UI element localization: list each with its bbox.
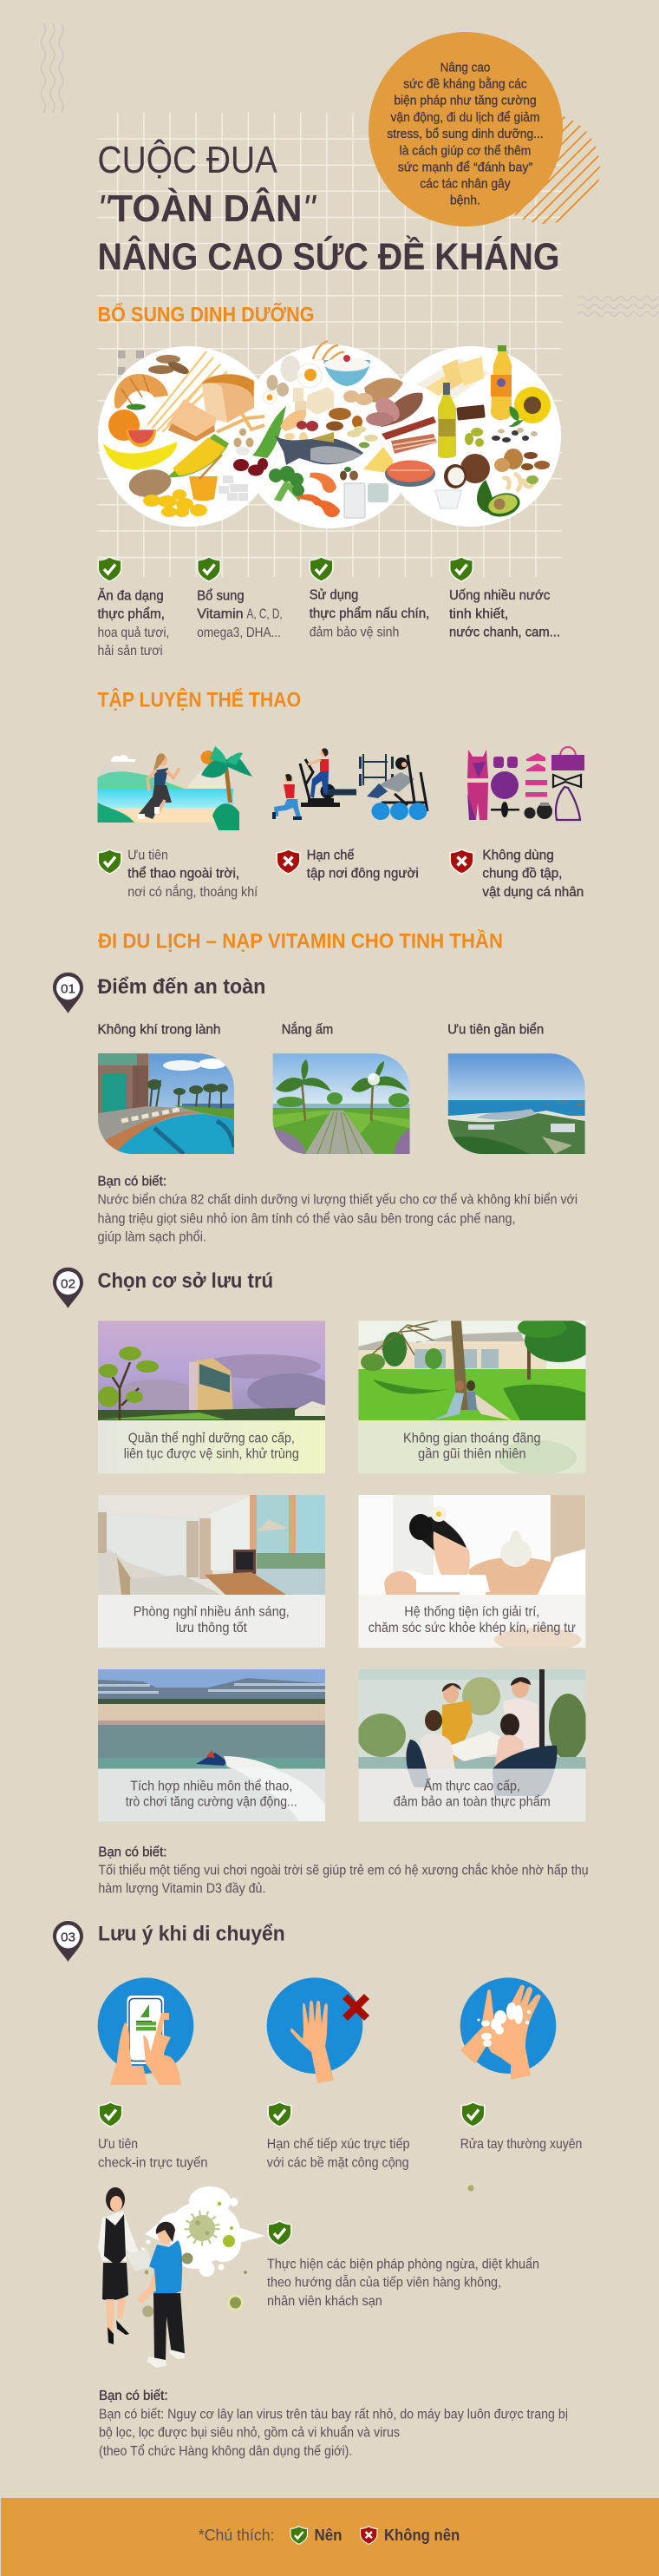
legend footer [1,2498,659,2576]
legend: should not: Không nên [384,2527,460,2544]
food plates illustration [98,341,561,528]
card: open green space: gần gũi thiên nhiên [418,1446,526,1461]
tip: follow staff guidance [267,2220,539,2309]
card: spa: chăm sóc sức khỏe khép kín, riêng tư [369,1621,576,1635]
tip: wash hands [460,2101,582,2152]
illustration: sports equipment [467,747,584,820]
tip: avoid crowds: tập nơi đông người [307,867,419,882]
tip: varied food [97,556,169,659]
tip: limit contact: Hạn chế tiếp xúc trực tiếp [267,2137,410,2152]
card: water sports: Tích hợp nhiều môn thể thao, [130,1779,292,1793]
did you know 3: bộ lọc, lọc được bụi siêu nhỏ, gồm cả vi khuẩn và virus [99,2425,400,2440]
tip: outdoor exercise: nơi có nắng, thoáng khí [127,883,258,900]
woman staff [98,2187,153,2344]
title: NÂNG CAO SỨC ĐỀ KHÁNG [97,235,560,279]
section 01 header [53,973,265,1013]
tip: vitamins [197,556,283,640]
section 01 header: Điểm đến an toàn [97,975,265,999]
tip: personal items: chung đồ tập, [482,867,562,882]
did you know 3: (theo Tổ chức Hàng không dân dụng thế giới). [99,2444,352,2459]
photo: palm trees [273,1053,410,1154]
travel tips [98,2101,582,2170]
intro callout: bệnh. [450,194,480,208]
destination labels: Nắng ấm [282,1021,333,1038]
illustration: beach run [97,746,252,830]
tip: varied food: hoa quả tươi, [97,626,169,640]
section 03 header [53,1921,285,1962]
card: open green space [359,1317,594,1475]
card: water sports: trò chơi tăng cường vận động... [126,1794,297,1809]
tip: vitamins: A, C, D, [246,607,283,622]
card: open green space: Không gian thoáng đãng [403,1431,541,1445]
did you know 1 [97,1175,577,1245]
tip: personal items [449,849,584,900]
icon: online check-in [98,1977,193,2085]
tip: avoid crowds: Hạn chế [307,849,355,863]
decorative striped circle [514,116,600,224]
plate 2: protein [252,341,437,518]
title [97,138,560,279]
did you know 3 [99,2389,568,2459]
illustration: gym [272,748,427,820]
tip: follow staff guidance: Thực hiện các biện pháp phòng ngừa, diệt khuẩn [267,2256,539,2271]
germ cloud [141,2186,265,2277]
intro callout [369,32,563,226]
card: dining: đảm bảo an toàn thực phẩm [394,1794,551,1809]
tip: personal items: vật dụng cá nhân [482,885,584,900]
exercise tips [97,849,584,900]
icon: avoid touching [267,1977,367,2083]
section 02 header: Chọn cơ sở lưu trú [97,1269,273,1293]
tip: vitamins: Bổ sung [197,588,245,604]
tip: follow staff guidance: nhân viên khách sạn [267,2294,382,2309]
tip: check-in: check-in trực tuyến [98,2155,208,2170]
title: "TOÀN DÂN" [97,187,317,230]
card: dining [357,1669,587,1822]
did you know 2: Bạn có biết: [98,1845,166,1859]
legend: should: Nên [314,2527,342,2544]
heading: nutrition: BỔ SUNG DINH DƯỠNG [97,303,314,327]
did you know 3: Bạn có biết: [99,2389,168,2403]
tip: follow staff guidance: theo hướng dẫn của tiếp viên hàng không, [267,2274,501,2291]
tip: cooked food: đảm bảo vệ sinh [310,625,399,639]
tip: wash hands: Rửa tay thường xuyên [460,2137,582,2152]
heading: travel: ĐI DU LỊCH – NẠP VITAMIN CHO TINH THẦN [98,929,503,954]
photo: resort pool [98,1053,234,1154]
destination labels: Ưu tiên gần biển [447,1022,544,1038]
tip: outdoor exercise: Ưu tiên [127,849,168,863]
intro callout: là cách giúp cơ thể thêm [400,144,531,158]
card: water sports [98,1669,325,1822]
section 03 header: Lưu ý khi di chuyển [98,1923,285,1946]
card: resort complex: Quần thể nghỉ dưỡng cao cấp, [128,1431,295,1445]
card: resort complex [98,1321,334,1474]
title: CUỘC ĐUA [97,138,278,181]
tip: limit contact: với các bề mặt công cộng [267,2155,409,2170]
destination labels: Không khí trong lành [97,1023,220,1038]
section 01 header: 01 [61,981,75,996]
card: bright room: Phòng nghỉ nhiều ánh sáng, [134,1605,290,1620]
icon: hand washing [460,1977,556,2080]
tip: avoid crowds [276,849,419,882]
legend: should [290,2526,342,2545]
did you know 1: giúp làm sạch phổi. [97,1230,206,1245]
section 02 header: 02 [61,1276,75,1291]
legend footer: *Chú thích: [199,2527,274,2544]
card: bright room: lưu thông tốt [176,1621,247,1635]
tip: drink water: Uống nhiều nước [449,588,550,603]
card: bright room [98,1495,325,1649]
intro callout: Nâng cao [440,61,490,75]
tip: drink water: tinh khiết, [449,606,508,621]
intro callout: biện pháp như tăng cường [394,95,537,108]
heading: exercise: TẬP LUYỆN THỂ THAO [97,688,301,712]
runner [138,753,179,819]
intro callout: vận động, đi du lịch để giảm [390,111,539,125]
tip: varied food: hải sản tươi [97,644,163,659]
man passenger [137,2222,185,2368]
intro callout: sức mạnh để “đánh bay” [398,161,532,175]
did you know 1: hàng triệu giọt siêu nhỏ ion âm tính có thể vào sâu bên trong các phế nang, [97,1211,515,1226]
tip: varied food: Ăn đa dạng [97,587,164,604]
tip: cooked food: thực phẩm nấu chín, [310,606,429,621]
card: resort complex: liên tục được vệ sinh, khử trùng [124,1446,299,1461]
plate 3: fats and oils [416,345,551,521]
tip: drink water: nước chanh, cam... [449,626,560,640]
tip: check-in [98,2101,208,2170]
section 02 header [53,1268,273,1308]
intro callout: các tác nhân gây [420,178,511,192]
section 03 header: 03 [61,1930,75,1945]
destination labels [97,1021,544,1038]
illustration: staff and passenger [98,2186,265,2368]
tip: varied food: thực phẩm, [97,606,165,622]
did you know 1: Nước biển chứa 82 chất dinh dưỡng vi lượng thiết yếu cho cơ thể và không khí biển với [97,1193,577,1208]
nutrition tips [97,556,560,659]
tip: cooked food [309,556,429,639]
tip: limit contact [267,2101,410,2170]
tip: outdoor exercise: thể thao ngoài trời, [127,866,239,882]
did you know 1: Bạn có biết: [97,1175,166,1190]
legend: should not [360,2526,460,2545]
tip: vitamins: omega3, DHA... [197,626,281,640]
tip: personal items: Không dùng [482,849,554,863]
intro callout: sức đề kháng bằng các [403,76,527,91]
did you know 2: hàm lượng Vitamin D3 đầy đủ. [98,1882,265,1897]
card: spa [359,1495,586,1652]
tip: vitamins: Vitamin [197,607,244,622]
tip: check-in: Ưu tiên [98,2137,138,2152]
small virus [468,2185,473,2192]
photo: seaside [448,1053,585,1154]
plate 1: carbs and fruit [103,351,268,517]
floating viruses [142,2270,247,2317]
did you know 2 [98,1845,589,1897]
tip: outdoor exercise [97,849,258,900]
tip: cooked food: Sử dụng [310,588,358,603]
did you know 2: Tối thiểu một tiếng vui chơi ngoài trời sẽ giúp trẻ em có hệ xương chắc khỏe nhờ hấp thụ [98,1863,589,1878]
did you know 3: Bạn có biết: Nguy cơ lây lan virus trên tàu bay rất nhỏ, do máy bay luôn được trang bị [99,2407,568,2422]
tip: drink water [449,556,560,640]
intro callout: stress, bổ sung dinh dưỡng... [387,128,544,141]
card: dining: Ẩm thực cao cấp, [424,1778,520,1793]
card: spa: Hệ thống tiện ích giải trí, [404,1605,539,1620]
